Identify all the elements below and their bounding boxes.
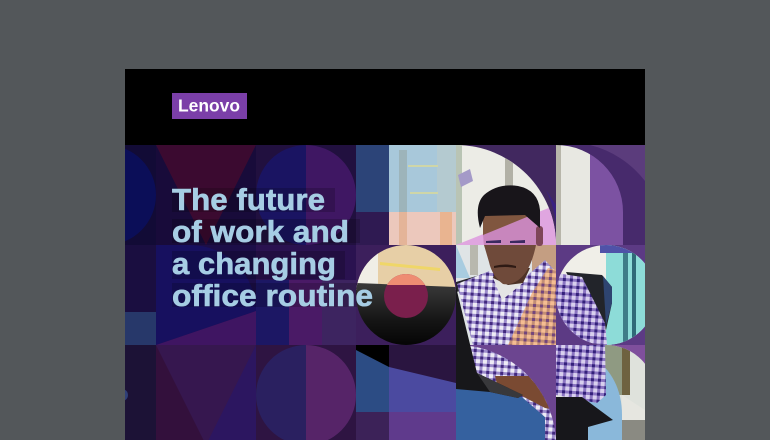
eyes and mouth	[486, 240, 525, 243]
cover card illustration	[125, 69, 645, 440]
panel: geometric pattern	[125, 145, 356, 440]
hair	[478, 185, 540, 228]
shirt body	[457, 260, 556, 345]
logo: Lenovo	[172, 93, 247, 119]
small circle on laptop	[384, 274, 428, 318]
row 1 shapes	[125, 145, 356, 245]
title: The future of work and a changing office routine: a changing	[172, 246, 336, 281]
title: The future of work and a changing office routine	[172, 182, 373, 313]
lower right window and tinted panel	[556, 345, 645, 440]
row 3 shapes	[116, 345, 356, 440]
lower shirt, arm and jeans inside quarter circle	[456, 345, 556, 440]
title: The future of work and a changing office routine: The future	[172, 182, 325, 217]
face	[484, 241, 536, 284]
photo: office background	[356, 145, 645, 440]
circle photo: right with chair and sleeve	[556, 245, 645, 345]
logo: Lenovo: Lenovo	[178, 96, 240, 116]
man in chair	[356, 185, 556, 440]
row 2 shapes	[125, 245, 356, 345]
title: The future of work and a changing office routine: office routine	[172, 278, 373, 313]
card	[125, 69, 645, 440]
jeans left of frame	[356, 350, 456, 412]
circle photo: left	[356, 245, 456, 352]
neck	[493, 268, 530, 285]
ear	[536, 226, 543, 246]
chair back left	[456, 274, 480, 292]
black header band	[125, 69, 645, 145]
title: The future of work and a changing office routine: of work and	[172, 214, 349, 249]
white tee	[493, 278, 523, 300]
laptop	[456, 287, 523, 398]
